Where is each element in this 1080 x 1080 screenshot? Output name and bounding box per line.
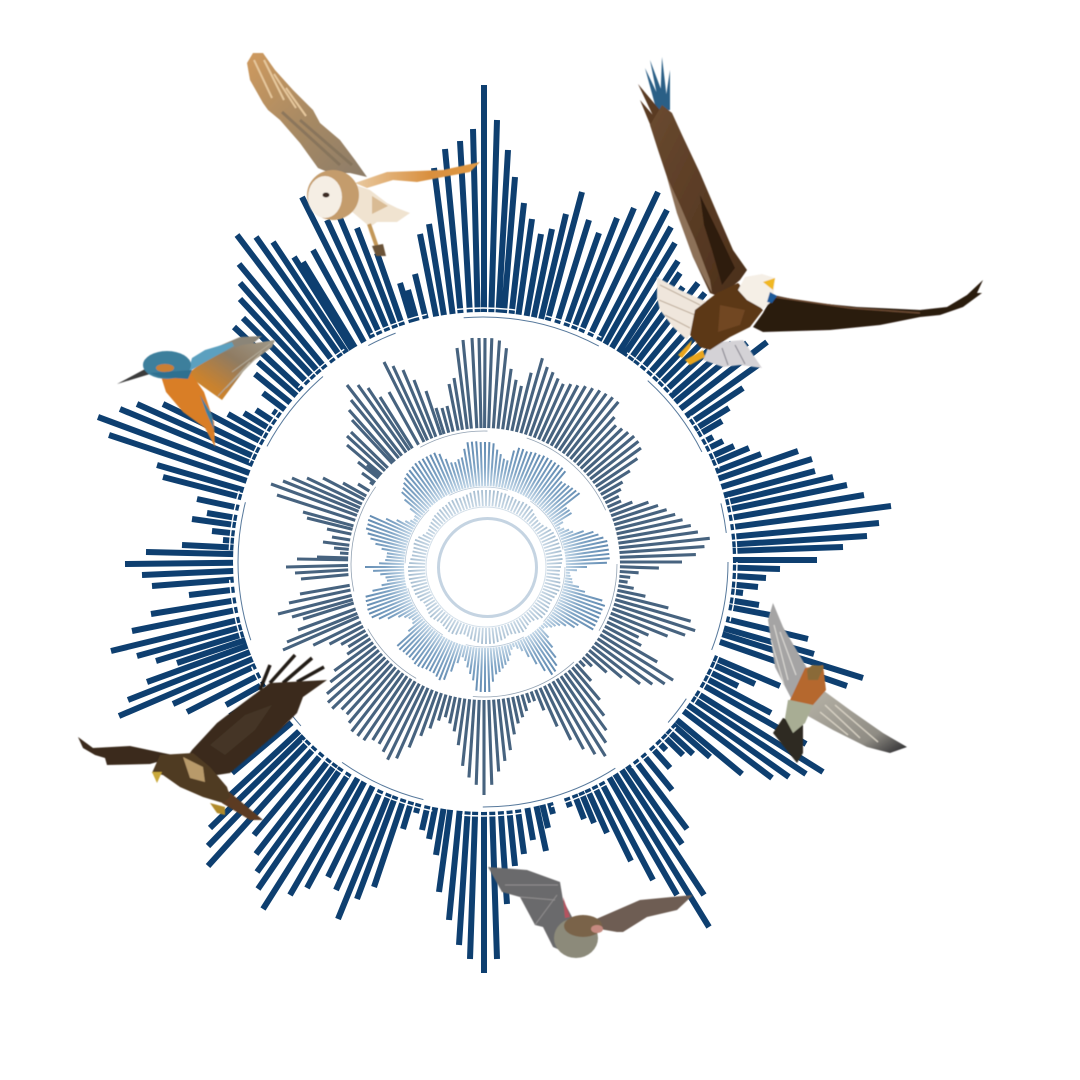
bird: kingfisher [117, 336, 275, 447]
middle radial bar ring [271, 338, 710, 795]
bird: buzzard [78, 655, 327, 820]
blue radial bar ring [365, 441, 610, 692]
outer radial bar ring [98, 85, 891, 973]
inner radial bar ring [408, 490, 563, 644]
center circle [438, 518, 536, 616]
bird: bat [488, 867, 693, 958]
bird: barn owl [247, 53, 480, 256]
bird: bald eagle [638, 57, 983, 368]
bird: fieldfare [768, 603, 907, 763]
